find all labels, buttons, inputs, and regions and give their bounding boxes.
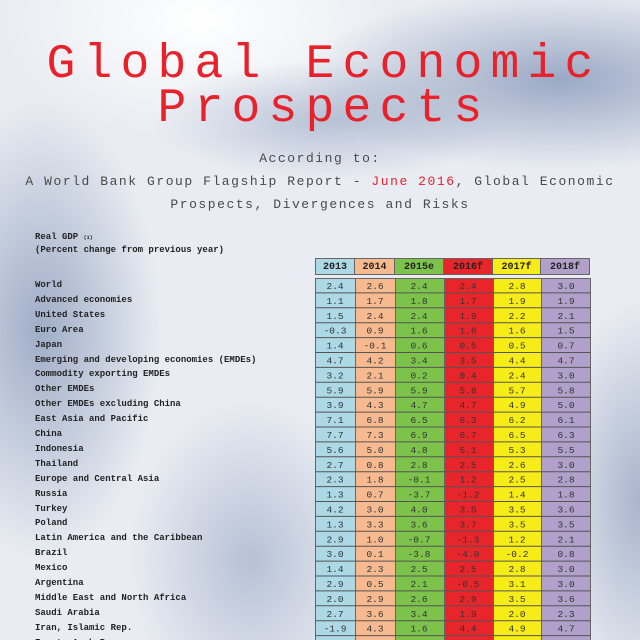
table: data: -0.7 [408,534,430,545]
table: data: 2.1 [557,534,575,545]
table: data: East Asia and Pacific [35,414,148,424]
table: data: 6.3 [459,415,477,426]
subtitle [25,151,615,212]
table: data: Argentina [35,578,84,588]
table: data: 4.8 [410,445,428,456]
table: data: 1.6 [410,624,428,635]
table: data: 4.2 [366,356,384,366]
table: data: 3.5 [459,504,477,516]
table: header: 2017f [501,262,532,273]
table: data: 1.6 [508,326,526,337]
table: data: Middle East and North Africa [35,593,186,603]
table: data: 2.1 [557,311,575,322]
table: data: 2.1 [410,579,428,590]
table caption [35,232,224,255]
table: data: 0.9 [366,326,384,337]
table: data: 5.7 [508,385,526,396]
table: data: 3.6 [366,609,384,620]
table: data: 0.5 [508,341,526,352]
table: data: 5.8 [557,385,575,396]
table: data: 4.7 [557,624,575,635]
table: data: -0.1 [364,341,387,352]
table: data: 2.4 [508,370,526,381]
table: data: 2.8 [410,460,428,471]
table: data: -1.9 [324,624,347,635]
table: data: 1.9 [557,296,575,307]
table: data: Advanced economies [35,295,132,305]
table: data: 3.6 [557,504,575,516]
table: data: 3.5 [508,504,526,516]
table: data: 1.7 [366,296,384,307]
table: data: 5.0 [366,445,384,456]
table: data: 3.5 [508,594,526,605]
table: data: 1.1 [326,296,344,307]
table: data: 1.4 [508,490,526,501]
table: data: 1.8 [410,296,428,307]
subtitle: Prospects, Divergences and Risks [170,197,470,212]
table: header: 2013 [323,262,347,273]
table: data: 1.0 [366,534,384,545]
table: data: 0.5 [459,341,477,352]
table: data: 2.3 [366,564,384,575]
table: data: 2.4 [366,311,384,322]
table: data: -0.2 [506,549,529,560]
table caption: Real GDP (1) [35,232,93,242]
subtitle: According to: [259,151,381,166]
table: header: 2014 [362,262,386,273]
table: data: Brazil [35,548,67,558]
table: data: 2.3 [326,475,344,486]
table: data: 3.0 [557,370,575,381]
table: data: 1.6 [459,326,477,337]
table: data: 2.9 [366,594,384,605]
table: data: 2.1 [366,370,384,381]
table: data: 1.8 [557,490,575,501]
table: data: 3.4 [410,609,428,620]
table: data: 2.5 [459,564,477,575]
table: data: Saudi Arabia [35,608,100,618]
table: data: 3.2 [326,370,344,381]
table: data: -0.5 [457,579,480,590]
table: data: 1.3 [326,490,344,501]
table: data: 4.4 [508,356,526,366]
table: data: 0.5 [366,579,384,590]
table: data: 2.4 [410,311,428,322]
table: data: 1.3 [326,519,344,530]
table: data: 2.6 [366,281,384,292]
title [46,38,602,136]
table: data: 3.4 [410,356,428,366]
table: data: 4.7 [410,400,428,411]
table: data: 4.9 [508,624,526,635]
table: data: 4.7 [326,356,344,366]
table: data: 5.9 [326,385,344,396]
table: data: 3.6 [557,594,575,605]
table: data: 3.1 [508,579,526,590]
table: data: 2.7 [326,609,344,620]
table: data: 2.9 [326,579,344,590]
table: data: 2.4 [459,281,477,292]
table: data: 4.4 [459,624,477,635]
table: data: 2.3 [557,609,575,620]
table: data: 2.7 [326,460,344,471]
table: data: 5.5 [557,445,575,456]
table: data: 3.5 [459,356,477,366]
table: data: -3.8 [408,549,431,560]
table: data: 3.9 [326,400,344,411]
table: data: 5.6 [326,445,344,456]
table: data: 2.9 [459,594,477,605]
table: data: Emerging and developing economies (EMDEs) [35,354,256,364]
table: data: 2.5 [508,475,526,486]
table: data: 3.5 [508,519,526,530]
table: data: 0.8 [366,460,384,471]
table: data: 6.5 [410,415,428,426]
table: data: 2.4 [410,281,428,292]
table: data: 2.4 [326,281,344,292]
table: data: 7.3 [366,430,384,441]
table: data: 4.3 [366,400,384,411]
table: data: -1.2 [457,490,480,501]
table: data: 6.9 [410,430,428,441]
table: data: 1.7 [459,296,477,307]
table: data: 1.6 [410,326,428,337]
table: data: 0.7 [366,490,384,501]
table: data: 5.9 [366,385,384,396]
table: data: 1.4 [326,341,344,352]
table: data: 2.6 [508,460,526,471]
table: data: -0.1 [408,475,431,486]
table: data: 6.8 [366,415,384,426]
table: data: Other EMDEs excluding China [35,399,181,409]
table: data: 4.2 [326,504,344,516]
table: data: 5.1 [459,445,477,456]
table: data: 4.3 [366,624,384,635]
table: data: 5.3 [508,445,526,456]
table: data: 2.0 [326,594,344,605]
table: data: 3.7 [459,519,477,530]
table: data: -3.7 [408,490,430,501]
table: data: -4.0 [457,549,480,560]
table: data: Euro Area [35,325,84,335]
table: data: 4.0 [410,504,428,516]
table: data: 3.0 [557,281,575,292]
table: data: 1.9 [508,296,526,307]
table: data: 0.6 [410,341,428,352]
table: data: Mexico [35,563,67,573]
table: data: 1.5 [326,311,344,322]
table: data: 2.2 [508,311,526,322]
table: data: 4.7 [459,400,477,411]
table: data: 2.0 [508,609,526,620]
table: data: 3.6 [410,519,428,530]
table: data: 0.8 [557,549,575,560]
table: data: 2.8 [557,475,575,486]
table: data [35,278,591,640]
subtitle: A World Bank Group Flagship Report - June 2016, Global Economic [25,174,615,189]
table: data: World [35,280,62,290]
table: data: 6.2 [508,415,526,426]
table: data: 3.0 [366,504,384,516]
table: data: Russia [35,489,67,499]
table: data: Latin America and the Caribbean [35,533,202,543]
table: data: 1.5 [557,326,575,337]
table: data: 0.1 [366,549,384,560]
table: data: 3.3 [366,519,384,530]
table: data: 3.0 [557,564,575,575]
table: data: 3.0 [557,579,575,590]
table: data: -0.3 [324,326,347,337]
table: data: 7.1 [326,415,344,426]
table: data: 0.2 [410,370,428,381]
table: data: Europe and Central Asia [35,474,159,484]
table caption: (Percent change from previous year) [35,245,224,255]
table: data: 6.1 [557,415,575,426]
title: Global Economic [46,38,602,92]
table: data: 1.9 [459,609,477,620]
table: data: 2.8 [508,281,526,292]
table: data: China [35,429,62,439]
table: data: 1.2 [508,534,526,545]
table: data: 6.5 [508,430,526,441]
table: header: 2016f [453,262,483,273]
table: data: -1.3 [457,534,480,545]
table: header [315,258,590,275]
table: data: Poland [35,518,67,528]
table: data: 3.0 [326,549,344,560]
table: data: Japan [35,340,62,350]
table: data: 4.7 [557,356,575,366]
table: data: 5.0 [557,400,575,411]
table: data: 1.2 [459,475,477,486]
table: data: 2.5 [410,564,428,575]
table: data: 6.7 [459,430,477,441]
table: data: 2.9 [326,534,344,545]
table: data: Other EMDEs [35,384,94,394]
table: data: 1.8 [366,475,384,486]
table: data: 1.9 [459,311,477,322]
table: data: 5.8 [459,385,477,396]
table: data: 2.5 [459,460,477,471]
table: data: 2.6 [410,594,428,605]
table: header: 2015e [404,262,434,273]
table: data: 4.9 [508,400,526,411]
table: data: 2.8 [508,564,526,575]
table: data: Iran, Islamic Rep. [35,623,132,633]
table: data: 0.7 [557,341,575,352]
table: data: Commodity exporting EMDEs [35,369,170,379]
table: data: Indonesia [35,444,84,454]
table: data: 6.3 [557,430,575,441]
table: data: Turkey [35,504,67,514]
table: header: 2018f [550,262,580,273]
table: data: 3.0 [557,460,575,471]
table: data: 7.7 [326,430,344,441]
table: data: 1.4 [326,564,344,575]
table: data: 3.5 [557,519,575,530]
title: Prospects [157,82,491,136]
table: data: 0.4 [459,370,477,381]
table: data: Thailand [35,459,78,469]
table: data: 5.9 [410,385,428,396]
table: data: United States [35,310,105,320]
